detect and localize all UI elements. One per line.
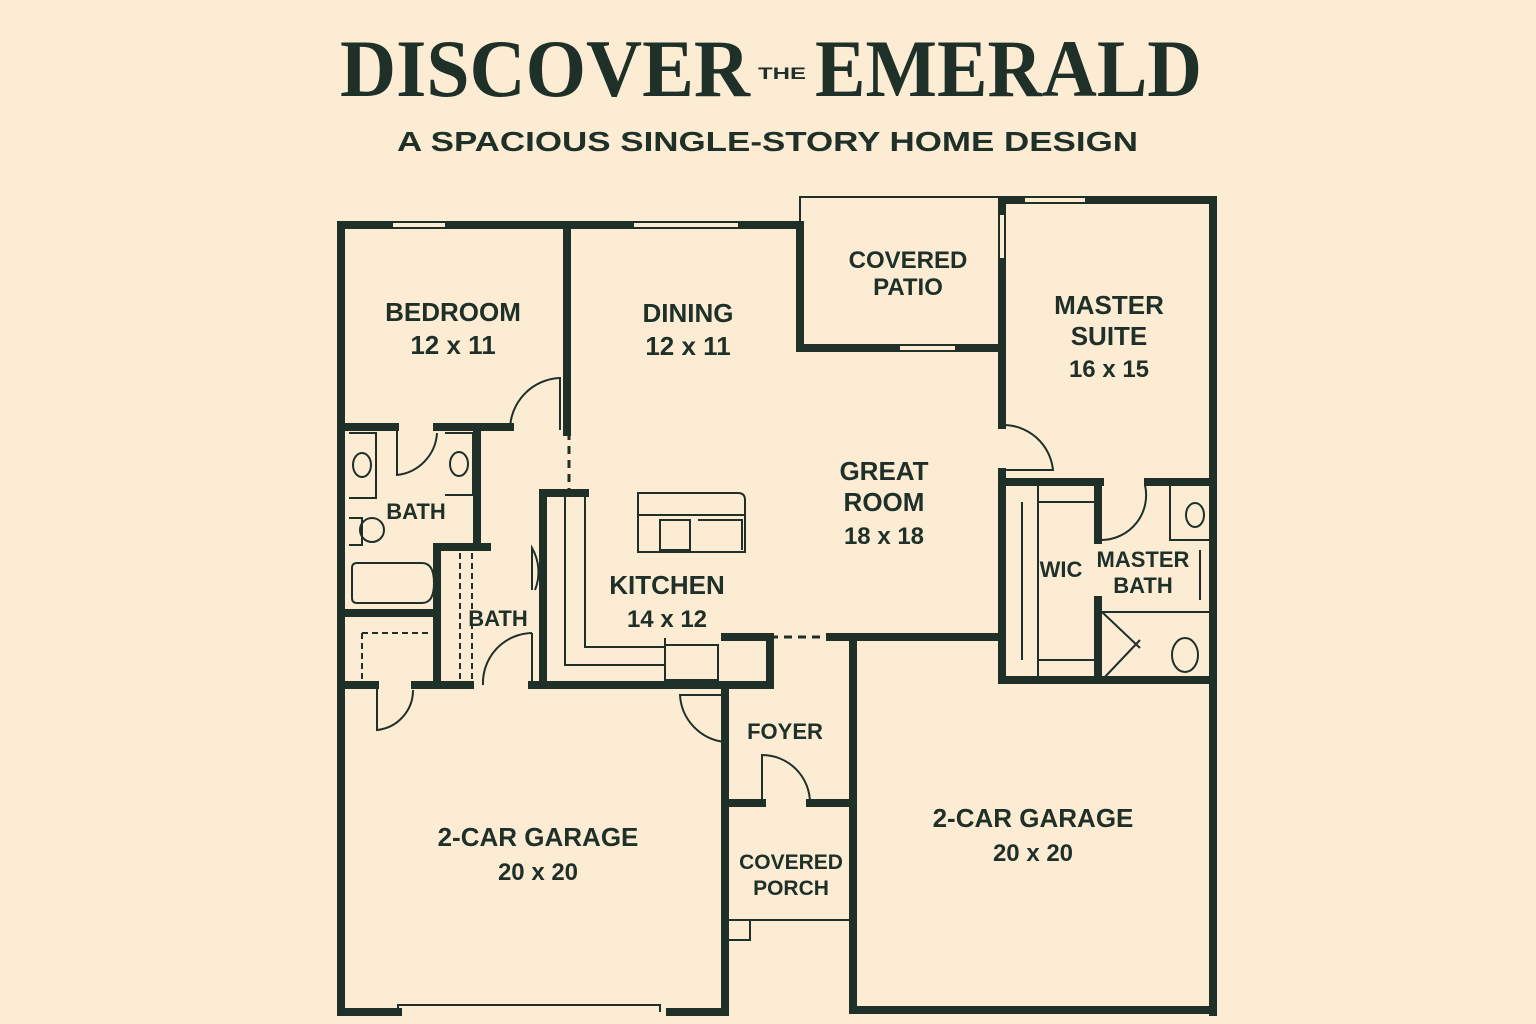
label: kitchen: 14 x 12 — [627, 606, 707, 633]
room labels — [385, 247, 1190, 900]
title: EMERALD — [815, 23, 1202, 114]
title: DISCOVER — [340, 23, 751, 114]
label: dining: DINING — [642, 298, 734, 328]
label: master bath: BATH — [1113, 573, 1173, 598]
label: bath 2: BATH — [468, 606, 528, 631]
label: master bath: MASTER — [1097, 547, 1189, 572]
label: garage left: 20 x 20 — [498, 859, 578, 886]
label: covered patio: COVERED — [849, 247, 967, 274]
windows — [393, 200, 1085, 1012]
label: bedroom: BEDROOM — [385, 297, 521, 327]
label: garage right: 20 x 20 — [993, 840, 1073, 867]
label: bedroom: 12 x 11 — [410, 330, 496, 360]
thin outlines — [349, 197, 1210, 1012]
label: covered patio: PATIO — [873, 274, 943, 301]
label: kitchen: KITCHEN — [609, 570, 725, 600]
label: bath: BATH — [386, 499, 446, 524]
floor plan — [341, 197, 1213, 1012]
label: master suite: 16 x 15 — [1069, 356, 1149, 383]
label: great room: 18 x 18 — [844, 523, 924, 550]
label: foyer: FOYER — [747, 719, 823, 744]
label: covered porch: PORCH — [753, 877, 829, 900]
label: master suite: MASTER — [1054, 290, 1164, 320]
walls — [341, 200, 1213, 1012]
title — [340, 23, 1202, 114]
label: master suite: SUITE — [1071, 321, 1147, 351]
label: great room: ROOM — [844, 487, 924, 517]
label: great room: GREAT — [839, 456, 929, 486]
label: dining: 12 x 11 — [645, 331, 731, 361]
title: THE — [758, 64, 806, 83]
subtitle: A SPACIOUS SINGLE-STORY HOME DESIGN — [397, 126, 1138, 157]
label: garage left: 2-CAR GARAGE — [438, 822, 638, 852]
label: covered porch: COVERED — [739, 851, 843, 874]
label: garage right: 2-CAR GARAGE — [933, 803, 1133, 833]
door swings — [377, 378, 1146, 803]
label: wic: WIC — [1040, 557, 1082, 582]
